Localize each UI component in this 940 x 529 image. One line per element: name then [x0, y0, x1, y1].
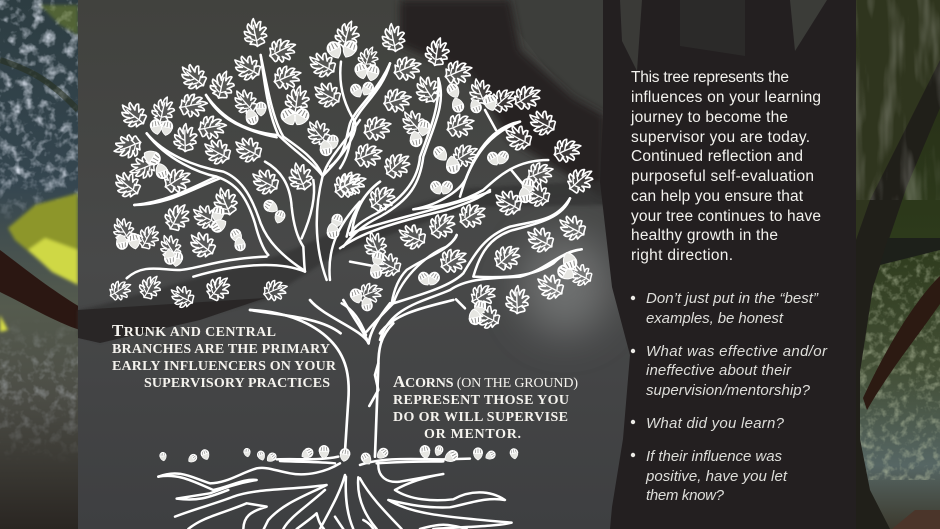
oak leaves — [106, 17, 599, 332]
bullet 2: What was effective and/or — [646, 343, 828, 360]
intro paragraph: healthy growth in the — [631, 227, 778, 244]
tree branches — [127, 55, 582, 457]
bullet list — [631, 290, 828, 504]
bullet 2 — [631, 343, 828, 399]
translucent panel: left grey overlay — [78, 0, 638, 529]
background photo: right tree trunk strip — [856, 0, 940, 529]
bullet 4 — [631, 448, 788, 504]
tree illustration — [106, 17, 599, 529]
caption: trunk and central branches: SUPERVISORY PRACTICES — [144, 376, 330, 391]
intro paragraph: influences on your learning — [631, 89, 821, 106]
intro paragraph: can help you ensure that — [631, 188, 804, 205]
lighter bark gaps — [620, 0, 642, 71]
bullet 2: supervision/mentorship? — [646, 382, 811, 399]
intro paragraph: journey to become the — [630, 109, 788, 126]
large dark branch, lower arm — [78, 180, 610, 342]
caption: trunk and central branches: BRANCHES ARE THE PRIMARY — [112, 342, 330, 357]
bullet 1: examples, be honest — [646, 310, 784, 327]
intro paragraph: purposeful self-evaluation — [631, 168, 814, 185]
intro paragraph: supervisor you are today. — [631, 129, 810, 146]
caption: acorns on the ground — [393, 372, 578, 442]
caption: acorns on the ground: OR MENTOR. — [424, 427, 521, 442]
bullet 4: If their influence was — [646, 448, 782, 465]
caption: trunk and central branches — [112, 321, 337, 391]
tree roots — [158, 457, 512, 529]
caption: trunk and central branches: EARLY INFLUENCERS ON YOUR — [112, 359, 337, 374]
caption: trunk and central branches: TRUNK AND CENTRAL — [112, 321, 276, 340]
caption: acorns on the ground: REPRESENT THOSE YOU — [393, 393, 569, 408]
intro paragraph: Continued reflection and — [631, 148, 803, 165]
intro paragraph: right direction. — [631, 247, 733, 264]
bullet 2: ineffective about their — [646, 362, 792, 379]
bullet 1: Don’t just put in the “best” — [646, 290, 819, 307]
acorns in canopy — [115, 38, 579, 326]
large dark branch, upper arm — [400, 0, 605, 200]
background photo: left forest strip — [0, 0, 80, 529]
intro paragraph: your tree continues to have — [631, 208, 821, 225]
intro paragraph — [630, 69, 821, 264]
fog patch — [520, 235, 610, 335]
textured upper patch — [500, 0, 605, 113]
bullet 1 — [631, 290, 819, 327]
caption: acorns on the ground: ACORNS (ON THE GROUND) — [393, 372, 578, 391]
dark panel: trunk behind text column — [600, 0, 856, 529]
intro paragraph: This tree represents the — [631, 69, 789, 86]
bullet 3: What did you learn? — [646, 415, 785, 432]
caption: acorns on the ground: DO OR WILL SUPERVISE — [393, 410, 568, 425]
bullet 4: positive, have you let — [645, 468, 788, 485]
acorns on the ground — [159, 444, 519, 467]
bullet 4: them know? — [646, 487, 725, 504]
